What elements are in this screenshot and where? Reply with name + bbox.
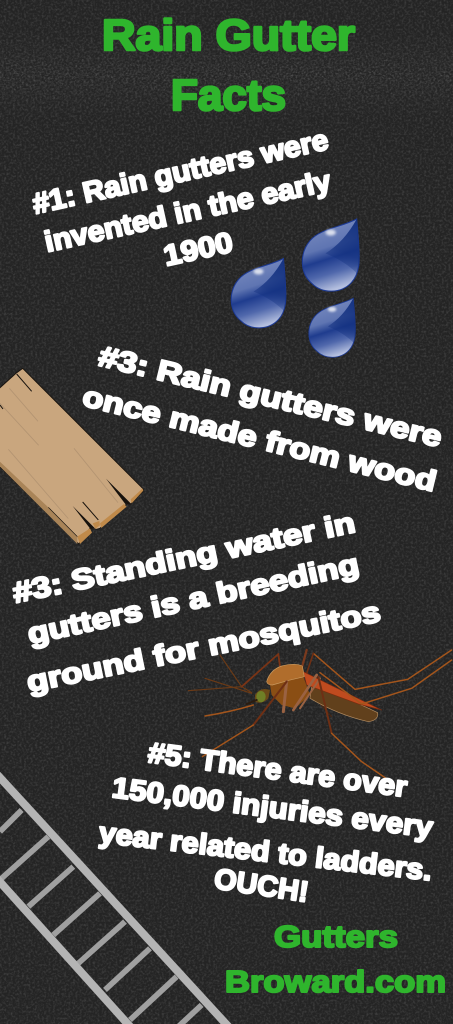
website footer: Broward.com <box>225 964 446 999</box>
title: Rain Gutter <box>102 11 355 60</box>
fact 5 text <box>97 737 435 909</box>
fact 2 text: #3: Rain gutters were <box>95 341 445 454</box>
fact 1 text: 1900 <box>161 227 236 273</box>
icon: ladder <box>0 774 230 1024</box>
title <box>102 11 355 120</box>
icon: wooden plank <box>0 368 143 544</box>
website footer <box>225 919 446 999</box>
fact 1 text <box>30 124 334 273</box>
fact 2 text <box>79 341 445 498</box>
fact 3 text: #3: Standing water in <box>10 507 358 610</box>
fact 1 text: invented in the early <box>42 165 334 259</box>
icon: mosquito <box>188 650 452 784</box>
fact 5 text: OUCH! <box>212 863 311 909</box>
title: Facts <box>171 71 286 120</box>
fact 5 text: #5: There are over <box>146 737 409 804</box>
fact 3 text <box>10 507 383 699</box>
fact 1 text: #1: Rain gutters were <box>30 124 331 221</box>
fact 5 text: year related to ladders. <box>97 817 434 887</box>
website footer: Gutters <box>274 919 398 954</box>
fact 2 text: once made from wood <box>79 381 439 498</box>
fact 3 text: gutters is a breeding <box>25 549 362 651</box>
fact 3 text: ground for mosquitos <box>24 596 383 699</box>
icon: water drops <box>231 219 359 357</box>
fact 5 text: 150,000 injuries every <box>110 772 435 844</box>
